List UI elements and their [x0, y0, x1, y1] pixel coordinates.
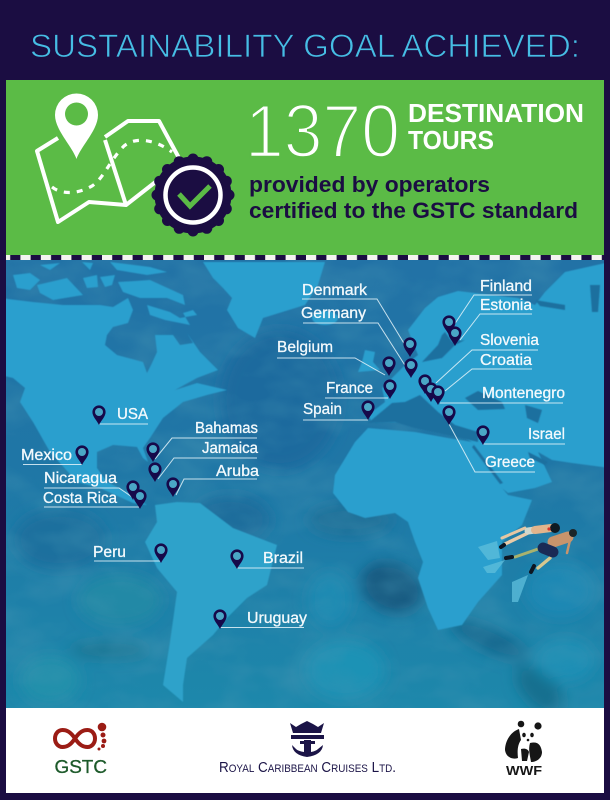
panel: world map over ocean photo: [0, 260, 610, 723]
map label: Costa Rica: [43, 489, 147, 509]
Greenland: [203, 262, 325, 338]
text: destination tours: TOURS: [408, 127, 494, 155]
map label: Mexico: Mexico: [21, 447, 72, 464]
map label: Spain: [303, 400, 375, 420]
map label: Costa Rica: Costa Rica: [43, 490, 117, 507]
text: destination tours: DESTINATION: [408, 100, 584, 128]
text: provided by operators: [249, 172, 578, 223]
map label: Peru: Peru: [93, 544, 126, 561]
map label: Spain: Spain: [303, 401, 342, 418]
South America: [145, 502, 277, 702]
panel: logo footer: [6, 708, 604, 793]
map label: Croatia: [424, 352, 532, 402]
map label: Uruguay: Uruguay: [247, 610, 307, 627]
logo: WWF panda: [505, 721, 542, 778]
map label: Estonia: [448, 297, 532, 346]
ocean shading: [14, 330, 595, 723]
map label: Croatia: Croatia: [480, 352, 532, 369]
map label: Slovenia: Slovenia: [480, 332, 539, 349]
title: SUSTAINABILITY GOAL ACHIEVED:: [30, 28, 580, 64]
panel: green headline: [6, 80, 604, 255]
logo: Royal Caribbean Cruises Ltd.: [219, 721, 396, 776]
Iceland: [312, 311, 338, 325]
text: provided by operators: certified to the GSTC standard: [249, 198, 578, 223]
map label: Peru: [93, 543, 168, 563]
swimmers photo detail: [478, 523, 577, 602]
logo: GSTC: [54, 723, 107, 777]
logo: WWF panda: WWF: [506, 763, 542, 778]
checker divider strip: [6, 255, 604, 260]
map label: Belgium: [277, 339, 396, 376]
fins: [478, 541, 528, 602]
map label: Germany: [301, 305, 418, 378]
map label: France: France: [326, 380, 373, 397]
logo: Royal Caribbean Cruises Ltd.: Royal Caribbean Cruises Ltd.: [219, 759, 396, 776]
map label: Finland: [442, 278, 532, 335]
map label: Greece: [442, 405, 535, 472]
map label: USA: [92, 405, 149, 425]
map label: Israel: [476, 425, 565, 445]
land masses: [0, 262, 610, 702]
map label: Slovenia: [418, 332, 539, 394]
map label: Mexico: [21, 445, 89, 465]
map label: Germany: Germany: [301, 305, 366, 322]
big number 1370: 1370: [245, 89, 400, 173]
map label: Israel: Israel: [528, 426, 565, 443]
map label: USA: USA: [117, 406, 149, 423]
map label: Greece: Greece: [485, 454, 535, 471]
Eurasia: [368, 262, 610, 493]
water texture: [6, 260, 604, 708]
North America: [0, 298, 227, 505]
Great Britain: [358, 350, 380, 372]
map label: Denmark: Denmark: [302, 282, 367, 299]
map label: Jamaica: Jamaica: [202, 440, 258, 457]
text: provided by operators: provided by operators: [249, 172, 490, 197]
icon: certified badge with check: [152, 154, 234, 236]
logo: GSTC: GSTC: [54, 757, 107, 777]
map label: Uruguay: [213, 609, 307, 629]
map label: Bahamas: Bahamas: [195, 420, 258, 437]
map label: Aruba: [166, 463, 259, 497]
map label: Brazil: Brazil: [263, 550, 303, 567]
map label: Denmark: [302, 282, 417, 357]
icon: folded map with location pin: [37, 93, 179, 222]
map label: Finland: Finland: [480, 278, 532, 295]
text: destination tours: [408, 100, 584, 155]
map label: Estonia: Estonia: [480, 297, 532, 314]
map label: Montenegro: Montenegro: [482, 385, 565, 402]
map label: Montenegro: [431, 385, 565, 405]
map label: Nicaragua: Nicaragua: [44, 470, 117, 487]
map label: Bahamas: [146, 420, 258, 462]
map label: France: [325, 379, 397, 399]
map label: Jamaica: [148, 440, 258, 482]
map label: Aruba: Aruba: [216, 463, 259, 480]
map label: Nicaragua: [44, 470, 140, 500]
map label: Brazil: [230, 549, 304, 569]
Arctic islands: [13, 273, 40, 290]
inland and marginal seas: [368, 285, 600, 484]
Africa: [333, 428, 532, 630]
map label: Belgium: Belgium: [277, 339, 333, 356]
